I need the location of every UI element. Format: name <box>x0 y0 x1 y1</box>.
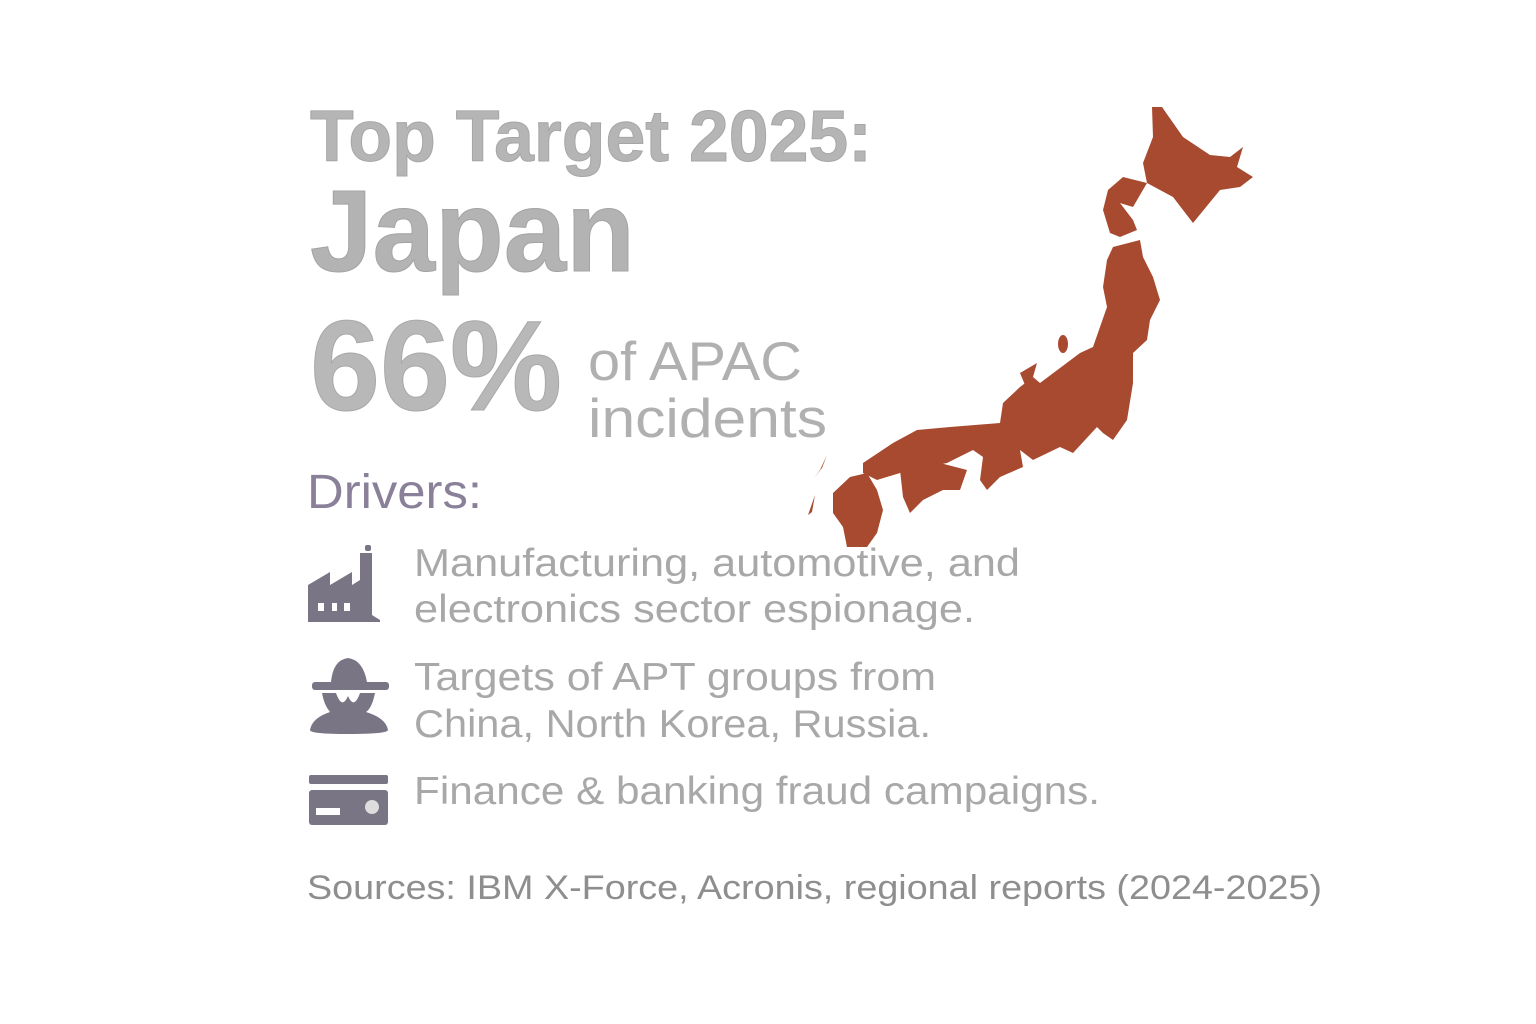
title: Top Target 2025: Top Target 2025: <box>310 97 872 177</box>
stat label: of APAC <box>588 330 802 392</box>
icon: factory <box>308 545 380 622</box>
heading: Japan: Japan <box>310 166 635 296</box>
icon: credit card <box>309 775 388 825</box>
driver 3 text: Finance & banking fraud campaigns. <box>414 770 1100 813</box>
driver 1 text: Manufacturing, automotive, and <box>414 542 1020 585</box>
stat label: incidents <box>588 387 827 449</box>
driver 2 text: China, North Korea, Russia. <box>414 703 931 746</box>
driver 1 text <box>414 542 1020 631</box>
stat: 66%: 66% <box>310 295 562 438</box>
heading: Drivers: Drivers: <box>307 466 482 519</box>
sources footer: Sources: IBM X-Force, Acronis, regional reports (2024-2025) <box>307 869 1322 907</box>
icon: spy <box>310 658 389 734</box>
map: Japan <box>808 107 1253 547</box>
driver 2 text: Targets of APT groups from <box>414 656 936 699</box>
driver 2 text <box>414 656 936 746</box>
driver 1 text: electronics sector espionage. <box>414 588 975 631</box>
stat label <box>588 330 827 449</box>
